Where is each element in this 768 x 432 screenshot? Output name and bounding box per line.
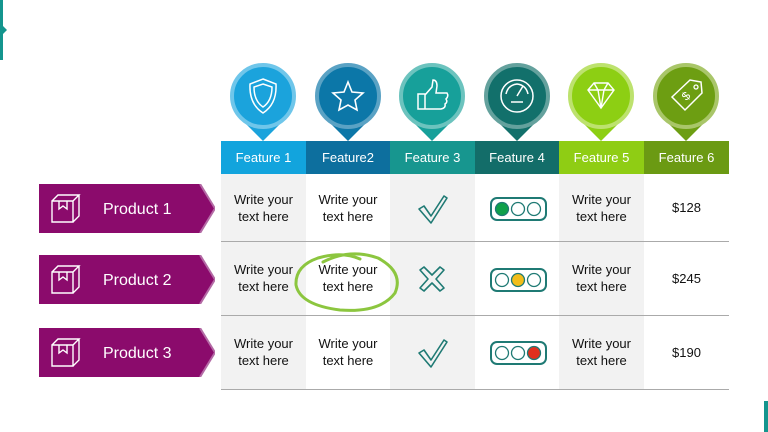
row 2 cells: text here <box>238 279 289 294</box>
accent bar left <box>0 0 7 60</box>
feature pins <box>230 63 719 141</box>
header row: Feature 3 <box>405 150 460 165</box>
header row <box>221 141 729 174</box>
row 3 cells: Write your <box>234 336 293 351</box>
product 2 label <box>39 255 215 304</box>
row 3 cells <box>234 336 701 368</box>
pin: star <box>317 65 379 141</box>
row 3 cells: text here <box>238 353 289 368</box>
product 1 label <box>39 184 215 233</box>
icon: traffic light yellow <box>491 269 546 291</box>
accent bar bottom right <box>764 401 768 432</box>
pin: shield <box>232 65 294 141</box>
row 1 cells: text here <box>238 208 289 224</box>
pin: price tag: $ <box>679 88 694 103</box>
row 1 cells: Write your <box>318 192 378 206</box>
row 1 cells: Write your <box>234 192 293 206</box>
pin: price tag <box>655 65 717 141</box>
row 2 cells: text here <box>576 279 627 294</box>
row 1 cells: text here <box>323 208 373 224</box>
row 1 cells <box>234 192 701 224</box>
pin: thumbs up <box>401 65 463 141</box>
header row: Feature 6 <box>659 150 714 165</box>
row 2 cells: Write your <box>318 262 378 277</box>
pin: diamond <box>570 65 632 141</box>
header row: Feature 5 <box>574 150 629 165</box>
row 1 cells: text here <box>576 208 627 224</box>
icon: check row1 <box>419 196 447 223</box>
icon: cross row2 <box>420 267 444 291</box>
pin: gauge <box>486 65 548 141</box>
row 3 cells: text here <box>323 353 373 368</box>
header row: Feature 1 <box>236 150 291 165</box>
product 3 label <box>39 328 215 377</box>
highlight circle <box>296 254 397 310</box>
row 3 cells: text here <box>576 353 627 368</box>
row 3 cells: $190 <box>672 344 701 360</box>
header row: Feature2 <box>322 150 374 165</box>
product 1 label: Product 1 <box>103 201 172 218</box>
product 3 label: Product 3 <box>103 345 172 362</box>
row 1 cells: $128 <box>672 200 701 215</box>
icon: traffic light green <box>491 198 546 220</box>
row 2 cells <box>234 262 701 294</box>
row 2 cells: $245 <box>672 270 701 286</box>
row 3 cells: Write your <box>318 336 378 351</box>
row 2 cells: text here <box>323 279 373 294</box>
column shading <box>221 174 729 390</box>
row 2 cells: Write your <box>572 262 631 277</box>
row 2 cells: Write your <box>234 262 293 277</box>
icon: check row3 <box>419 340 447 367</box>
header row: Feature 4 <box>489 150 545 165</box>
product 2 label: Product 2 <box>103 272 172 289</box>
row 1 cells: Write your <box>572 192 631 206</box>
icon: traffic light red <box>491 342 546 364</box>
row 3 cells: Write your <box>572 336 631 351</box>
